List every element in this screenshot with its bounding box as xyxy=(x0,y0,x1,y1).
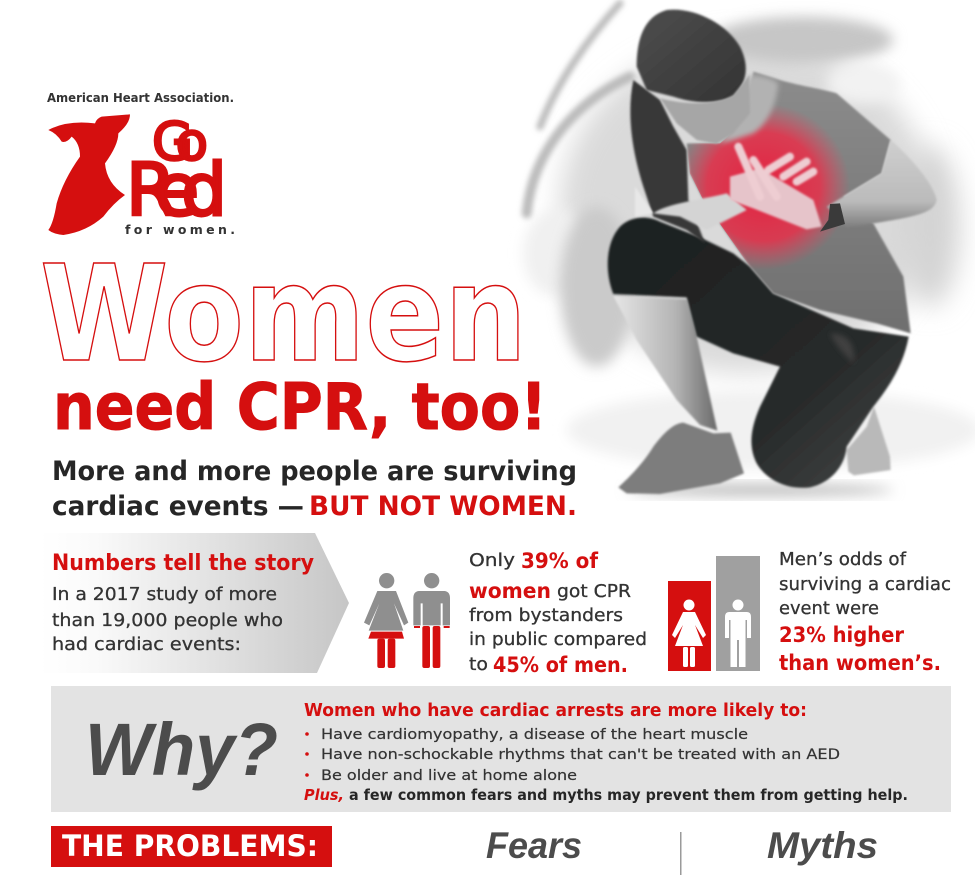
stat: men's odds 23 percent higher: surviving a cardiac xyxy=(779,575,951,595)
photo background: tree trunks xyxy=(527,3,630,213)
logo dress xyxy=(48,114,130,235)
why closing line: Plus, xyxy=(304,786,344,804)
stat: 39 percent of women vs 45 percent of men: got CPR xyxy=(557,581,631,602)
face xyxy=(660,75,750,144)
why list: Have cardiomyopathy, a disease of the heart muscle xyxy=(321,727,748,743)
stat: 39 percent of women vs 45 percent of men: 45% of men. xyxy=(493,653,628,677)
why list: Be older and live at home alone xyxy=(321,768,577,784)
shirt xyxy=(687,72,911,333)
stat: 39 percent of women vs 45 percent of men: 39% of xyxy=(521,549,599,573)
panel text: In a 2017 study of more xyxy=(52,584,277,605)
logo: Go Red for Women: for women. xyxy=(125,222,235,237)
right arm xyxy=(827,140,937,227)
panel text xyxy=(52,584,283,655)
logo: American Heart Association: American Heart Association. xyxy=(47,91,234,105)
stat: 39 percent of women vs 45 percent of men: Only xyxy=(469,550,515,571)
logo wordmark: Go xyxy=(152,112,208,173)
front shoe xyxy=(618,423,744,494)
stat: men's odds 23 percent higher: than women’s. xyxy=(779,651,941,675)
icon: man xyxy=(413,573,450,668)
stat: 39 percent of women vs 45 percent of men: women xyxy=(469,579,551,603)
bare shin xyxy=(613,296,717,431)
watch xyxy=(820,203,845,232)
panel heading: Numbers tell the story xyxy=(52,551,314,576)
red chest glow xyxy=(688,108,847,268)
subtitle: cardiac events — xyxy=(52,491,304,522)
panel text: than 19,000 people who xyxy=(52,610,283,631)
bar chart: survival odds, women vs men xyxy=(668,556,760,671)
subtitle: BUT NOT WOMEN. xyxy=(309,491,577,522)
subtitle: More and more people are surviving xyxy=(52,456,577,487)
leggings highlight xyxy=(830,333,854,363)
icon: woman and man, partially filled in red xyxy=(364,573,450,668)
icon: woman in bar xyxy=(672,600,706,667)
column heading: fears: Fears xyxy=(486,825,582,866)
stat: 39 percent of women vs 45 percent of men: to xyxy=(469,654,488,675)
arrow background xyxy=(40,533,349,673)
why panel background xyxy=(51,686,951,812)
icon: woman xyxy=(364,573,408,668)
stat: 39 percent of women vs 45 percent of men: in public compared xyxy=(469,629,647,650)
bar: women xyxy=(668,581,711,671)
panel: why xyxy=(51,686,951,812)
stat: men's odds 23 percent higher xyxy=(779,550,951,675)
logo: Go Red for Women xyxy=(48,112,235,237)
neck xyxy=(720,75,778,143)
stat: 39 percent of women vs 45 percent of men xyxy=(469,549,647,677)
logo: Go Red for Women: Red xyxy=(126,148,227,232)
stat: 39 percent of women vs 45 percent of men: from bystanders xyxy=(469,605,623,626)
head hair xyxy=(637,10,746,102)
panel: numbers tell the story xyxy=(40,533,349,673)
title: need CPR, too!: need CPR, too! xyxy=(53,371,547,445)
photo background: blurred trees xyxy=(523,17,975,496)
stat: men's odds 23 percent higher: 23% higher xyxy=(779,623,905,647)
leggings xyxy=(608,218,909,488)
why closing line: a few common fears and myths may prevent them from getting help. xyxy=(349,786,908,804)
photo: woman kneeling and clutching her chest xyxy=(523,3,975,496)
problems banner: THE PROBLEMS: xyxy=(62,829,318,863)
panel text: had cardiac events: xyxy=(52,634,241,655)
stat: men's odds 23 percent higher: Men’s odds of xyxy=(779,550,907,570)
icon: man in bar xyxy=(725,600,751,667)
left forearm xyxy=(653,193,747,230)
stat: men's odds 23 percent higher: event were xyxy=(779,599,879,619)
back shoe xyxy=(847,407,891,475)
why list heading: Women who have cardiac arrests are more likely to: xyxy=(304,701,807,721)
hands xyxy=(730,147,822,229)
title: Women outline: Women xyxy=(40,238,527,392)
why list xyxy=(305,727,840,784)
why list: Have non-schockable rhythms that can't be treated with an AED xyxy=(321,747,840,763)
long hair xyxy=(630,80,705,243)
column heading: myths: Myths xyxy=(767,825,878,866)
subtitle xyxy=(52,456,577,522)
why heading: Why? xyxy=(85,708,278,791)
light shape behind arm xyxy=(635,187,653,217)
bar: men xyxy=(716,556,760,671)
